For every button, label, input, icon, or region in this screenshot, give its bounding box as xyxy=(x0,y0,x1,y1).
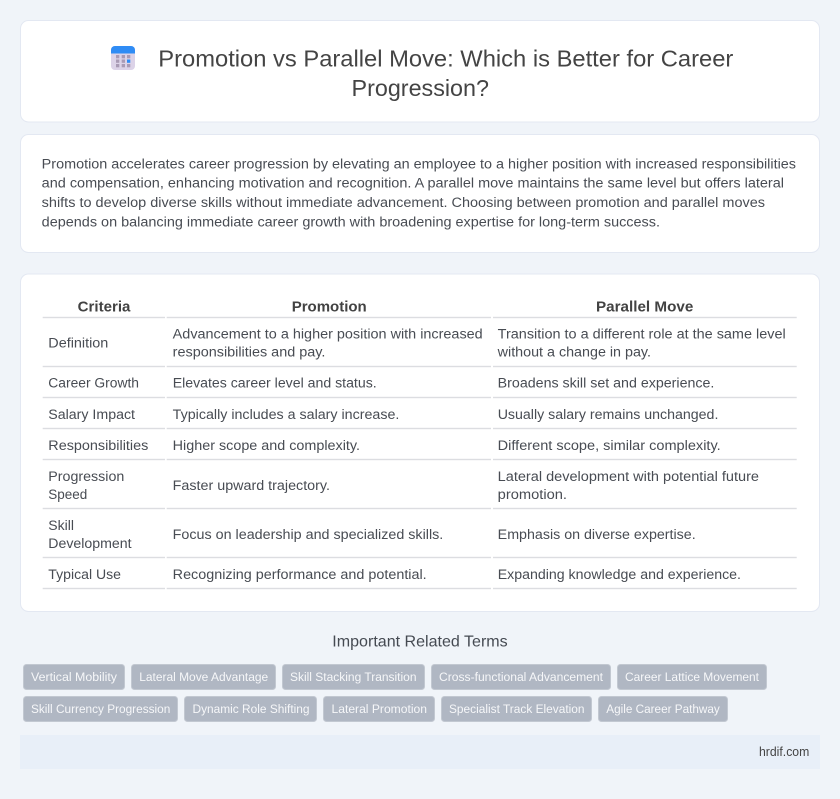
row: Responsibilities: Responsibilities xyxy=(48,438,148,454)
row: Skill Development: Emphasis on diverse expertise. xyxy=(498,527,696,543)
row: Typical Use: Recognizing performance and potential. xyxy=(173,567,427,583)
related terms tags xyxy=(24,664,766,722)
row: Progression Speed: Lateral development with potential future xyxy=(498,469,759,485)
footer credit: hrdif.com xyxy=(759,745,809,759)
row: Skill Development: Skill xyxy=(48,518,74,534)
header panel xyxy=(20,20,820,122)
row: Progression Speed: Faster upward trajectory. xyxy=(173,478,330,494)
row: Career Growth: Broadens skill set and experience. xyxy=(498,376,714,392)
tag: Career Lattice Movement xyxy=(618,664,766,690)
tag: Vertical Mobility xyxy=(24,664,124,690)
row: Career Growth: Elevates career level and status. xyxy=(173,376,377,392)
row: Responsibilities: Higher scope and complexity. xyxy=(173,438,360,454)
tag: Career Lattice Movement: Career Lattice Movement xyxy=(625,670,760,684)
intro text: Promotion accelerates career progression by elevating an employee to a higher position with increased responsibilities xyxy=(42,156,796,172)
tag: Lateral Move Advantage: Lateral Move Advantage xyxy=(139,670,268,684)
tag: Dynamic Role Shifting: Dynamic Role Shifting xyxy=(192,702,310,716)
tag: Agile Career Pathway xyxy=(598,696,728,722)
tag: Skill Stacking Transition xyxy=(282,664,424,690)
row: Skill Development: Development xyxy=(48,536,132,552)
table header row xyxy=(78,299,693,316)
icon: calendar xyxy=(111,46,135,70)
tag: Cross-functional Advancement xyxy=(432,664,610,690)
row: Salary Impact: Salary Impact xyxy=(48,407,135,423)
tag: Specialist Track Elevation: Specialist Track Elevation xyxy=(449,702,584,716)
intro text xyxy=(42,156,796,230)
intro text: shifts to develop diverse skills without immediate advancement. Choosing between promotion and parallel moves xyxy=(42,195,765,211)
footer bar xyxy=(20,735,820,769)
row: Progression Speed: Speed xyxy=(48,487,87,503)
title: Progression? xyxy=(352,75,489,101)
comparison table panel xyxy=(20,274,820,612)
row: Definition: without a change in pay. xyxy=(497,345,651,361)
row: Salary Impact: Usually salary remains unchanged. xyxy=(498,407,718,423)
row: Progression Speed: Progression xyxy=(48,469,124,485)
row: Responsibilities: Different scope, similar complexity. xyxy=(498,438,721,454)
tag: Skill Stacking Transition: Skill Stacking Transition xyxy=(290,670,416,684)
tag: Lateral Move Advantage xyxy=(132,664,276,690)
related terms heading: Important Related Terms xyxy=(332,634,508,651)
table grid lines xyxy=(43,317,797,589)
row: Career Growth xyxy=(48,376,714,392)
tag: Agile Career Pathway: Agile Career Pathway xyxy=(606,702,721,716)
tag: Skill Currency Progression xyxy=(24,696,178,722)
tag: Skill Currency Progression: Skill Currency Progression xyxy=(31,702,170,716)
intro text: and compensation, enhancing motivation and recognition. A parallel move maintains the same level but offers lateral xyxy=(42,176,784,192)
row: Skill Development xyxy=(48,518,696,552)
tag: Lateral Promotion: Lateral Promotion xyxy=(332,702,427,716)
row: Progression Speed: promotion. xyxy=(498,487,567,503)
tag: Vertical Mobility: Vertical Mobility xyxy=(31,670,118,684)
row: Responsibilities xyxy=(48,438,721,454)
row: Typical Use xyxy=(48,567,741,583)
row: Definition: Advancement to a higher position with increased xyxy=(173,327,483,343)
tag: Dynamic Role Shifting xyxy=(184,696,316,722)
row: Definition: Definition xyxy=(48,336,108,352)
row: Skill Development: Focus on leadership and specialized skills. xyxy=(173,527,443,543)
tag: Specialist Track Elevation xyxy=(442,696,592,722)
row: Definition xyxy=(48,327,786,361)
row: Salary Impact: Typically includes a salary increase. xyxy=(173,407,399,423)
intro text: depends on balancing immediate career growth with broadening expertise for long-term success. xyxy=(42,214,660,230)
tag: Cross-functional Advancement: Cross-functional Advancement xyxy=(439,670,604,684)
title xyxy=(158,46,733,101)
title: Promotion vs Parallel Move: Which is Better for Career xyxy=(158,46,733,72)
row: Salary Impact xyxy=(48,407,718,423)
row: Definition: responsibilities and pay. xyxy=(173,345,325,361)
row: Progression Speed xyxy=(48,469,759,503)
row: Definition: Transition to a different role at the same level xyxy=(498,327,786,343)
tag: Lateral Promotion xyxy=(324,696,434,722)
intro panel xyxy=(20,134,820,252)
row: Typical Use: Typical Use xyxy=(48,567,121,583)
row: Typical Use: Expanding knowledge and experience. xyxy=(498,567,741,583)
table header row: Criteria xyxy=(78,299,131,316)
row: Career Growth: Career Growth xyxy=(48,376,139,392)
table header row: Parallel Move xyxy=(596,299,693,316)
table header row: Promotion xyxy=(292,299,367,316)
